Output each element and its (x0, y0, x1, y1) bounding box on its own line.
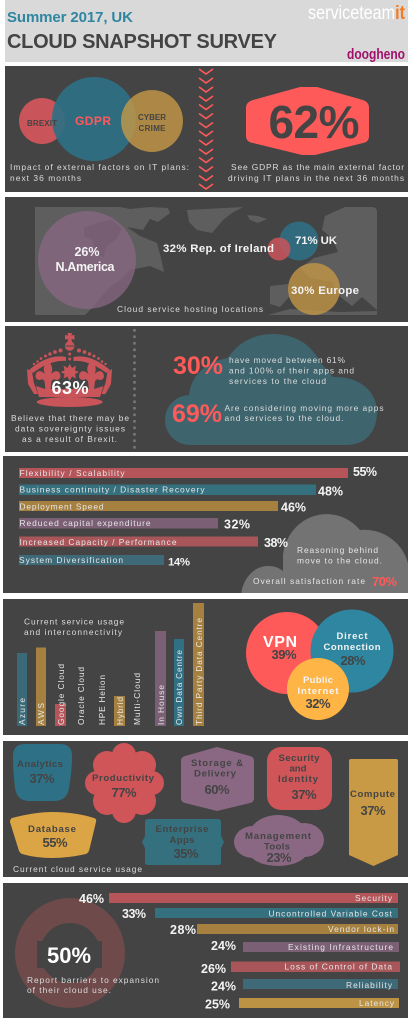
badge: Storage and Delivery: Delivery (194, 768, 237, 780)
bar chart: barriers: 24% (211, 980, 236, 994)
caption: service usage (24, 616, 124, 637)
stat: 69%: and services to the cloud. (224, 413, 344, 423)
bar chart: reasons: Increased Capacity / Performance (20, 537, 177, 547)
bar chart: services: Hybrid (115, 697, 125, 725)
bar chart: reasons: Reduced capital expenditure (20, 518, 151, 528)
panel: header (5, 0, 408, 63)
badge: Enterprise Apps (142, 819, 224, 865)
caption: barriers: of their cloud use. (27, 985, 111, 995)
stat: 69%: Are considering moving more apps (224, 403, 384, 413)
badge: Management Tools: Management (245, 831, 312, 842)
venn: connectivity: 28% (340, 653, 366, 668)
badge: Management Tools: Tools (264, 842, 290, 852)
badge: Storage and Delivery: 60% (204, 782, 230, 797)
cloud (165, 334, 377, 445)
badge: Analytics: 37% (30, 771, 55, 786)
badge: 62%: 62% (268, 96, 360, 148)
badge: Management Tools: 23% (266, 850, 292, 865)
bubble: Ireland (268, 238, 290, 260)
venn: connectivity: VPN (263, 634, 297, 651)
bar chart: reasons: 32% (224, 518, 250, 532)
caption: cloud service usage: Current cloud service usage (13, 864, 142, 874)
cloud: satisfaction (241, 514, 409, 598)
dotted divider (133, 329, 136, 450)
venn: connectivity: Connection (324, 642, 381, 653)
venn: external factors: CYBER (138, 113, 166, 122)
panel: external factors (5, 66, 408, 192)
badge: Security and Identity: Security (278, 753, 320, 764)
badge: Enterprise Apps: 35% (174, 846, 199, 861)
caption: data sovereignty (11, 413, 129, 444)
stat: 30%: 30% (173, 352, 223, 380)
caption: service usage: and interconnectivity (24, 627, 123, 637)
badge: Compute: Compute (350, 789, 395, 800)
caption: GDPR driver (228, 162, 404, 183)
badge: Database (10, 812, 96, 858)
bar chart: barriers: Latency (359, 998, 395, 1008)
panel: service usage (3, 599, 408, 735)
caption: GDPR driver: See GDPR as the main external factor (231, 162, 404, 172)
bar chart: services: HPE Helion (97, 675, 107, 725)
badge: Database: 55% (42, 835, 68, 850)
panel: hosting locations (5, 197, 408, 322)
caption: data sovereignty: data sovereignty issues (15, 424, 125, 434)
bar chart: barriers: 25% (205, 998, 230, 1012)
subtitle: Summer 2017, UK (7, 9, 133, 26)
badge: Analytics (13, 744, 72, 801)
bar chart: services: In House (156, 685, 166, 725)
bar chart: services: Multi-Cloud (132, 673, 142, 725)
caption: GDPR driver: driving IT plans in the next 36 months (228, 173, 404, 183)
label: Europe: 30% Europe (291, 285, 359, 297)
title: CLOUD SNAPSHOT SURVEY (7, 31, 278, 53)
badge: Security and Identity: Identity (278, 774, 319, 785)
badge: Storage and Delivery (181, 747, 254, 811)
bar chart: barriers: Vendor lock-in (328, 924, 394, 934)
venn: external factors: BREXIT (27, 119, 57, 128)
map (35, 207, 377, 315)
bar chart: services (17, 603, 204, 726)
bar chart: reasons: 38% (264, 536, 288, 550)
badge: Enterprise Apps: Enterprise (156, 824, 208, 835)
badge: Management Tools (234, 815, 324, 866)
badge: Storage and Delivery: Storage & (191, 758, 243, 769)
venn: connectivity: Public (303, 675, 333, 686)
venn: external factors: GDPR (75, 114, 111, 128)
venn: connectivity: Direct (336, 631, 368, 642)
donut: 50% (28, 910, 112, 996)
caption: impact: Impact of external factors on IT plans: (10, 162, 189, 172)
label: UK: 71% UK (295, 235, 338, 247)
stat: 30% (173, 352, 354, 386)
label: Ireland: 32% Rep. of Ireland (163, 243, 274, 255)
cloud: satisfaction: 70% (372, 574, 397, 589)
bar chart: reasons: 14% (168, 556, 190, 568)
stat: 30%: have moved between 61% (229, 355, 346, 365)
bar chart: barriers: 26% (201, 962, 226, 976)
badge: Productivity: Productivity (92, 773, 155, 784)
bar chart: reasons: 48% (318, 484, 343, 498)
stat: 69%: 69% (172, 400, 222, 428)
badge: Analytics: Analytics (17, 759, 63, 770)
panel: cloud service usage (3, 741, 408, 877)
bubble: North America: N.America (56, 260, 116, 274)
bubble: North America (38, 211, 136, 309)
bar chart: reasons: Business continuity / Disaster Recovery (20, 484, 205, 494)
bar chart: reasons: System Diversification (19, 555, 123, 565)
bar chart: barriers: Loss of Control of Data (284, 962, 392, 972)
bar chart: services: Oracle Cloud (76, 667, 86, 725)
donut: 50%: 50% (47, 943, 91, 968)
bar chart: services: Own Data Centre (174, 650, 184, 725)
caption: impact: next 36 months (10, 173, 81, 183)
bar chart: services: Google Cloud (56, 664, 66, 725)
caption: data sovereignty: Believe that there may be (11, 413, 129, 423)
bar chart: services: AWS (36, 703, 46, 725)
badge: Security and Identity (267, 747, 332, 810)
badge: Compute: 37% (360, 803, 386, 818)
bar chart: barriers: 33% (122, 907, 146, 921)
panel: barriers (3, 883, 408, 1018)
cloud: satisfaction: Overall satisfaction rate (253, 576, 365, 586)
bubble: North America: 26% (74, 245, 100, 259)
bar chart: barriers: 24% (211, 939, 236, 953)
caption: data sovereignty: as a result of Brexit. (22, 434, 117, 444)
badge: Productivity: 77% (112, 785, 137, 800)
panel: reasons for moving (3, 456, 409, 598)
caption: impact (10, 162, 189, 183)
panel: Brexit and moves (5, 326, 408, 452)
badge: 62% (246, 87, 369, 155)
badge: Compute (349, 759, 398, 866)
arrow: chevron divider (199, 69, 213, 189)
badge: Security and Identity: and (290, 764, 307, 774)
caption: barriers (27, 975, 159, 995)
label: 63%: 63% (52, 378, 88, 398)
bar chart: barriers: Existing Infrastructure (288, 942, 393, 952)
bubble: Europe (288, 263, 340, 315)
stat: 30%: and 100% of their apps and (229, 366, 354, 376)
badge: Enterprise Apps: Apps (170, 835, 194, 846)
bar chart: reasons: 55% (353, 465, 377, 479)
venn: connectivity: 32% (306, 696, 331, 711)
caption: barriers: Report barriers to expansion (27, 975, 159, 985)
badge: Database: Database (28, 824, 76, 835)
venn: connectivity: Internet (298, 686, 339, 697)
caption: hosting locations: Cloud service hosting locations (117, 304, 263, 314)
bar chart: reasons: Flexibility / Scalability (20, 468, 125, 478)
venn: connectivity (246, 610, 394, 720)
bar chart: services: Azure (17, 698, 27, 725)
map: Hudson Bay shading (84, 220, 122, 258)
bar chart: barriers: Security (355, 893, 393, 903)
cloud: satisfaction: Reasoning behind (297, 545, 378, 555)
bar chart: services: Third Party Data Centre (194, 618, 204, 725)
logo: serviceteamit: serviceteamit (308, 3, 406, 24)
bar chart: barriers: 46% (79, 892, 104, 906)
venn: connectivity: 39% (272, 647, 297, 662)
icon: crown (27, 333, 112, 407)
bar chart: barriers: Uncontrolled Variable Cost (268, 908, 393, 918)
cloud: satisfaction: move to the cloud. (297, 556, 382, 566)
bar chart: barriers: 28% (170, 923, 196, 937)
caption: service usage: Current service usage (24, 616, 124, 626)
badge: Security and Identity: 37% (292, 787, 317, 802)
venn: external factors: CRIME (138, 124, 166, 133)
bubble: UK (280, 222, 318, 260)
badge: Productivity (85, 743, 164, 823)
venn: external factors (19, 77, 183, 161)
stat: 30%: services to the cloud (229, 376, 326, 386)
stat: 69% (172, 400, 384, 428)
bar chart: reasons (19, 465, 377, 568)
bar chart: barriers (79, 892, 400, 1012)
bar chart: barriers: Reliability (346, 980, 393, 990)
bar chart: reasons: 46% (281, 500, 306, 514)
bar chart: reasons: Deployment Speed (20, 502, 104, 512)
